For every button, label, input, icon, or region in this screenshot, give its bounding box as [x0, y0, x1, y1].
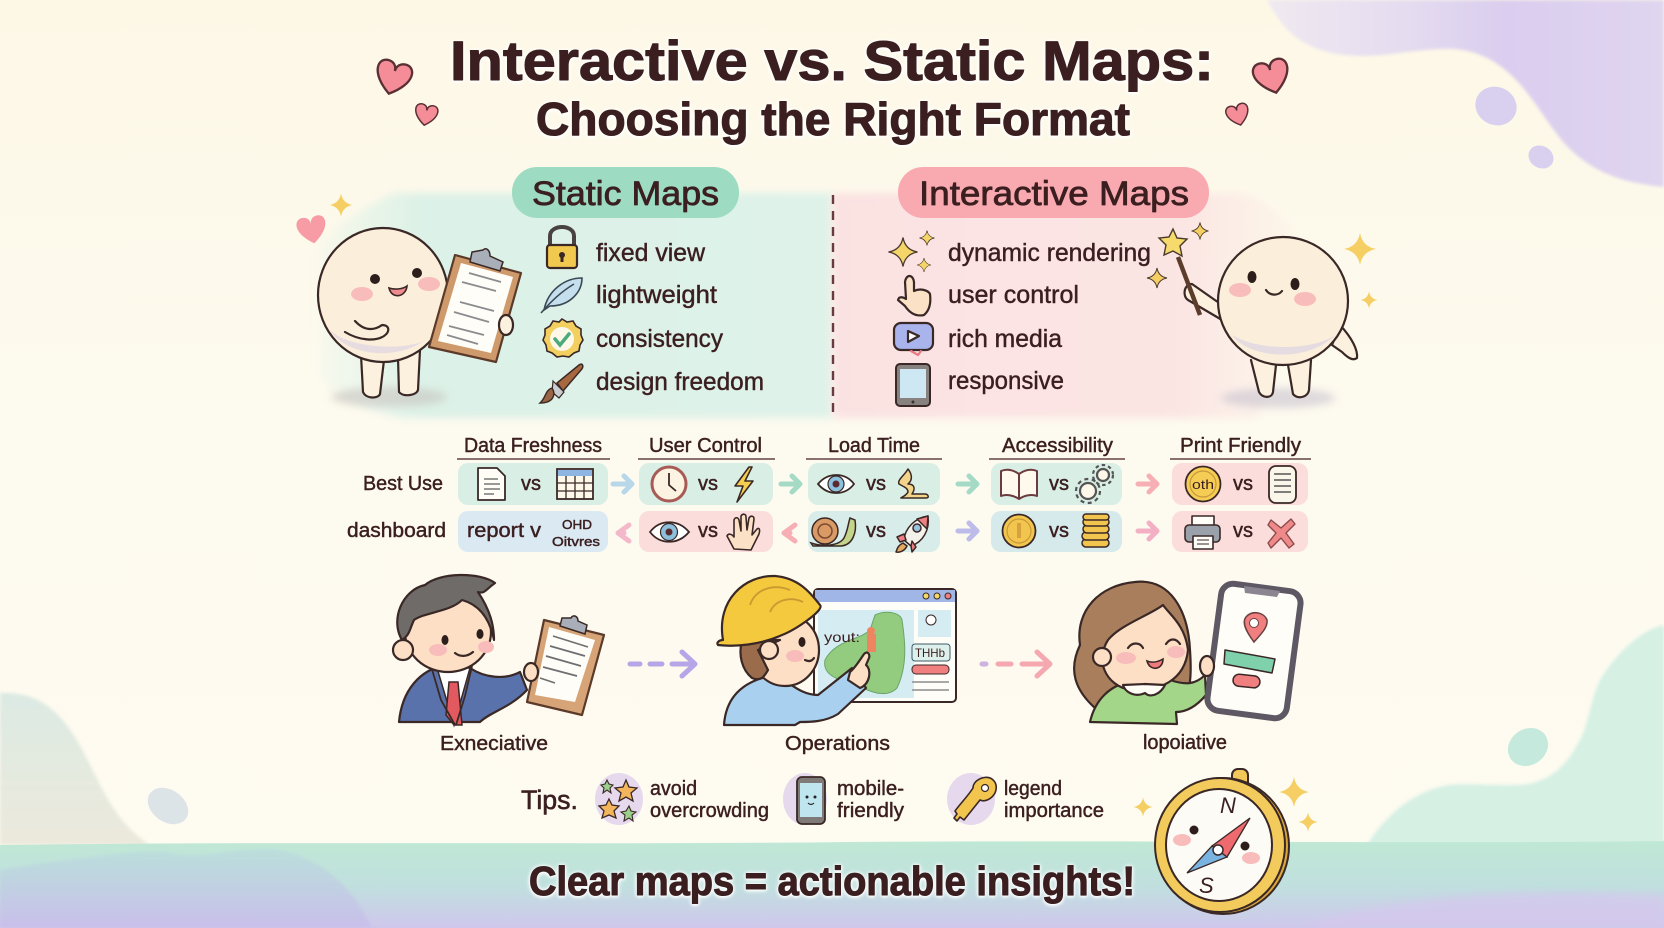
heading: tips: Tips. — [521, 785, 578, 815]
character: interactive mascot — [1147, 222, 1378, 408]
icon: document — [478, 468, 505, 500]
hair — [1074, 582, 1191, 708]
label: Operations — [785, 733, 890, 755]
icon: video player — [894, 323, 933, 355]
text: mobile-friendly: mobile- — [837, 778, 904, 800]
text: rich media: rich media — [948, 325, 1062, 353]
icon: coin: oth — [1192, 477, 1214, 492]
browser window: yout: — [824, 629, 860, 645]
icon: open book — [1001, 470, 1037, 499]
tips — [521, 773, 1104, 825]
text: mobile-friendly — [837, 778, 904, 822]
icon: gold coin — [1002, 514, 1036, 548]
icon: key — [947, 773, 996, 825]
text: legend importance: importance — [1004, 800, 1104, 822]
browser window — [814, 589, 956, 702]
vs labels: vs — [1233, 473, 1253, 495]
title: Interactive vs. Static Maps: — [450, 29, 1214, 92]
arrow: executive to operations — [630, 652, 695, 676]
icon: compass: N — [1220, 793, 1236, 818]
pointing hand — [848, 653, 869, 688]
icon: padlock — [547, 227, 577, 268]
divider — [832, 195, 834, 412]
icon: open hand — [727, 514, 760, 550]
icon: tablet — [896, 364, 930, 406]
face — [1102, 605, 1188, 690]
icon: feather — [541, 278, 582, 313]
vs labels: vs — [866, 473, 886, 495]
text: user control: user control — [948, 281, 1079, 309]
text: lightweight: lightweight — [596, 281, 717, 309]
text: garbled chart label — [552, 517, 601, 549]
icon: printer — [1185, 516, 1220, 549]
row labels — [347, 472, 446, 542]
body — [1090, 675, 1206, 724]
vs labels: vs — [698, 520, 718, 542]
text: responsive: responsive — [948, 367, 1064, 395]
icon: coin — [1186, 466, 1220, 502]
text: avoid overcrowding: avoid — [650, 778, 697, 800]
icon: table — [557, 469, 593, 499]
vs labels: vs — [866, 520, 886, 542]
arrows row two — [618, 523, 1157, 541]
text: mobile-friendly: friendly — [837, 800, 904, 822]
vs labels: vs — [698, 473, 718, 495]
icon: smiling phone — [783, 773, 827, 825]
browser window: THHb — [915, 646, 945, 660]
clipboard — [527, 616, 604, 715]
icon: stars — [595, 773, 643, 825]
icon: lightning — [735, 467, 753, 502]
text: garbled chart label: OHD — [562, 517, 592, 532]
column headers: Accessibility — [1002, 435, 1113, 457]
row labels: Best Use — [363, 472, 443, 495]
heading: interactive maps: Interactive Maps — [919, 175, 1189, 213]
icon: sparkles — [1147, 222, 1378, 308]
icon: compass: S — [1199, 873, 1214, 898]
text: report: report v — [467, 519, 542, 542]
icon: clock — [652, 467, 686, 501]
vs labels: vs — [1233, 520, 1253, 542]
character: static mascot — [295, 194, 521, 407]
text: garbled chart label: Oitvres — [552, 534, 601, 549]
comparison table — [347, 435, 1311, 552]
icon: swoosh — [899, 469, 928, 498]
footer message: Clear maps = actionable insights! — [529, 858, 1135, 904]
icon: pointing hand — [898, 276, 930, 315]
vs labels: vs — [521, 473, 541, 495]
cells — [458, 463, 1308, 552]
column headers: Print Friendly — [1180, 435, 1301, 457]
icon: eye — [818, 475, 854, 493]
icon: check badge — [543, 319, 583, 357]
heading: static maps — [512, 167, 739, 218]
icon: gears — [1076, 465, 1113, 503]
icon: wand star — [1159, 229, 1187, 256]
icon: sparkles — [888, 230, 934, 272]
panel: interactive maps — [833, 167, 1378, 418]
icon: cross — [1268, 519, 1295, 548]
arrows row one — [613, 476, 1157, 492]
icon: rocket — [896, 516, 928, 552]
text: avoid overcrowding: overcrowding — [650, 800, 769, 822]
icon: coin stack — [1082, 514, 1109, 547]
icon: compass sparkles — [1134, 777, 1318, 832]
vs labels: vs — [1049, 473, 1069, 495]
head — [751, 614, 819, 686]
column headers: Data Freshness — [464, 435, 602, 457]
icon: sparkle — [330, 194, 352, 216]
title: Choosing the Right Format — [536, 93, 1130, 145]
persona: mobile user — [1074, 582, 1302, 754]
vs labels: vs — [1049, 520, 1069, 542]
icon: heart — [295, 214, 329, 246]
heading: interactive maps — [898, 167, 1209, 218]
hard hat — [717, 576, 821, 646]
text: design freedom: design freedom — [596, 368, 764, 396]
icon: device — [1269, 466, 1296, 503]
icon: paintbrush — [540, 364, 583, 403]
text: avoid overcrowding — [650, 778, 769, 822]
arrow: operations to mobile — [982, 652, 1050, 676]
clipboard — [429, 249, 521, 362]
body — [724, 668, 866, 725]
text: consistency: consistency — [596, 325, 723, 353]
persona: executive — [393, 575, 604, 755]
panel: static maps — [295, 167, 832, 418]
text: dynamic rendering: dynamic rendering — [948, 239, 1151, 267]
heading: static maps: Static Maps — [532, 175, 719, 213]
text: fixed view: fixed view — [596, 239, 706, 267]
head — [405, 592, 491, 672]
icon: snail — [811, 518, 855, 546]
vs labels — [521, 473, 1253, 542]
icon: eye — [650, 522, 689, 542]
column headers — [457, 435, 1311, 459]
title — [450, 29, 1214, 145]
column headers: Load Time — [828, 435, 920, 457]
phone — [1206, 582, 1302, 720]
label: Exneciative — [440, 733, 548, 755]
persona: operations — [717, 576, 956, 755]
text: legend importance: legend — [1004, 778, 1062, 800]
row labels: dashboard — [347, 519, 446, 542]
label: lopoiative — [1143, 732, 1227, 754]
icon: compass — [1155, 769, 1289, 914]
column headers: User Control — [649, 435, 762, 457]
text: legend importance — [1004, 778, 1104, 822]
icon: title hearts — [372, 57, 1293, 128]
